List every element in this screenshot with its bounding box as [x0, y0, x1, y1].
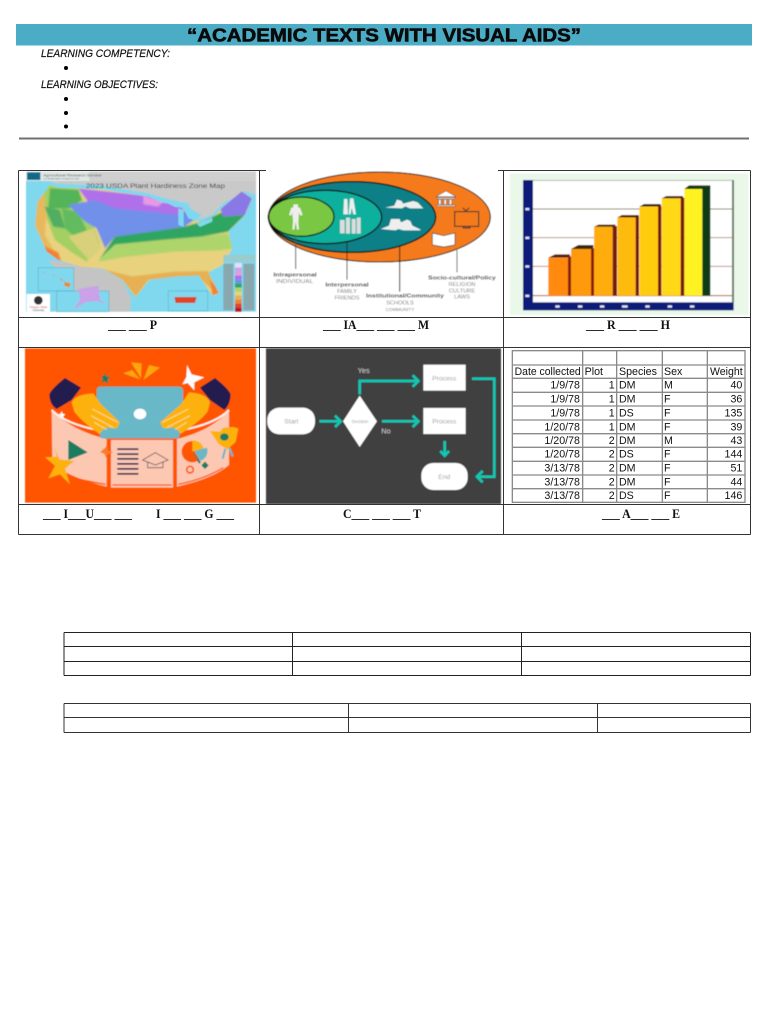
label: policy: LAWS: [454, 295, 470, 301]
icon: person: [289, 204, 303, 230]
community ellipse: [268, 182, 436, 252]
weight column: 44: [730, 476, 742, 488]
university logo: [27, 294, 50, 312]
plot column: 2: [609, 490, 615, 502]
node: process yes: Process: [432, 375, 457, 382]
answer: infographic word two: I ___ ___ G ___: [156, 506, 234, 521]
sex column: F: [664, 421, 671, 433]
left arm: [49, 378, 81, 409]
small orange star: [100, 445, 113, 458]
node: decision: [343, 396, 377, 447]
node: process yes: [423, 365, 466, 391]
plot column: [609, 380, 615, 502]
species column: DM: [619, 421, 636, 433]
small white star: [58, 411, 65, 419]
outer socio-cultural ellipse: [268, 172, 490, 262]
table header: Species: [619, 366, 657, 378]
species column: [619, 380, 636, 502]
species column: DM: [619, 380, 636, 392]
laptop logo: [134, 409, 146, 419]
axes: [523, 180, 734, 310]
image: flowchart: [266, 348, 501, 504]
date column: 1/9/78: [550, 380, 580, 392]
icon: government building: [436, 191, 456, 206]
weight column: 51: [730, 463, 742, 475]
answer: table: ___ A___ ___ E: [601, 506, 680, 521]
species column: DM: [619, 435, 636, 447]
label: interpersonal: Interpersonal: [325, 283, 369, 289]
label: community: [366, 294, 445, 312]
map title: 2023 USDA Plant Hardiness Zone Map: [86, 184, 226, 190]
table header: Sex: [664, 366, 683, 378]
laptop: [97, 387, 183, 438]
label: interpersonal: FRIENDS: [335, 296, 360, 302]
weight column: 39: [730, 421, 742, 433]
species column: DM: [619, 463, 636, 475]
icon: bird: [210, 427, 238, 459]
green star: [101, 372, 110, 384]
image: social ecological model: [267, 171, 498, 316]
plot column: 2: [609, 463, 615, 475]
map legend: [223, 255, 255, 312]
gridlines: [533, 209, 732, 296]
USDA header: U.S. DEPARTMENT OF AGRICULTURE: [43, 177, 80, 180]
icon: book: [432, 233, 455, 247]
label: intrapersonal: [273, 272, 317, 285]
node: process no: [423, 408, 466, 434]
table header: Plot: [585, 366, 603, 378]
node: decision: Decision: [352, 419, 369, 424]
sex column: F: [664, 463, 671, 475]
label: intrapersonal: Intrapersonal: [273, 272, 317, 278]
right hand: [160, 392, 210, 434]
weight column: 40: [730, 380, 742, 392]
date column: 1/9/78: [550, 407, 580, 419]
species column: DM: [619, 394, 636, 406]
node: start: Start: [284, 419, 299, 426]
white star: [182, 365, 204, 390]
weight column: 43: [730, 435, 742, 447]
date column: 1/20/78: [544, 421, 580, 433]
table grid: [512, 351, 745, 502]
plot column: 1: [609, 394, 615, 406]
answer: graph: ___ R ___ ___ H: [585, 317, 670, 332]
yes label: Yes: [358, 366, 370, 375]
node: end: [421, 463, 468, 490]
yellow star: [45, 447, 74, 484]
answer: map: ___ ___ P: [107, 317, 157, 332]
table header: Date collected: [515, 366, 581, 378]
species column: DS: [619, 407, 634, 419]
university logo: Oregon State: [29, 305, 48, 309]
title: “ACADEMIC TEXTS WITH VISUAL AIDS”: [187, 26, 581, 46]
icon: family: [340, 218, 361, 234]
label: policy: CULTURE: [449, 288, 475, 294]
interpersonal ellipse: [268, 190, 382, 244]
species column: DS: [619, 449, 634, 461]
date column: 1/9/78: [550, 394, 580, 406]
icon: diamond: [201, 462, 209, 469]
icon: friends: [343, 198, 356, 214]
plot column: 1: [609, 380, 615, 392]
sex column: F: [664, 490, 671, 502]
interpersonal connector: [345, 242, 348, 280]
label: community: SCHOOLS: [386, 300, 414, 306]
weight column: [725, 380, 742, 502]
Alaska inset: [57, 286, 109, 312]
bars: [548, 185, 710, 296]
Hawaii inset: [38, 268, 74, 291]
icon: television: [455, 208, 479, 228]
date column: 3/13/78: [544, 463, 580, 475]
weight column: 135: [725, 407, 742, 419]
plot column: 1: [609, 407, 615, 419]
date column: 3/13/78: [544, 476, 580, 488]
label: community: COMMUNITY: [386, 307, 414, 312]
plot column: 1: [609, 421, 615, 433]
plot column: 2: [609, 435, 615, 447]
arrows: [319, 375, 494, 482]
image: USDA plant hardiness zone map: [26, 172, 256, 312]
learning competency heading: LEARNING COMPETENCY:: [41, 48, 170, 60]
sex column: M: [664, 380, 673, 392]
table header: Weight: [710, 366, 743, 378]
right arm: [200, 378, 231, 410]
date column: 1/20/78: [544, 435, 580, 447]
policy connector: [455, 250, 458, 272]
icon: pie chart: [182, 440, 208, 464]
species column: DS: [619, 490, 634, 502]
plot column: 2: [609, 476, 615, 488]
USDA header: [26, 172, 102, 181]
sex column: F: [664, 394, 671, 406]
species column: DM: [619, 476, 636, 488]
answer: chart: C___ ___ ___ T: [343, 506, 421, 521]
sex column: F: [664, 407, 671, 419]
label: policy: RELIGION: [448, 282, 476, 288]
empty table one: [64, 632, 750, 676]
image: data table: [512, 351, 745, 502]
icon: gear: [187, 466, 193, 473]
date column: 1/20/78: [544, 449, 580, 461]
curved screen panels: [52, 410, 229, 488]
left hand finger lines: [91, 409, 118, 430]
great lakes: [162, 200, 212, 227]
answer: diagram: ___ IA___ ___ ___ M: [322, 317, 429, 332]
no label: No: [381, 426, 391, 435]
node: end: End: [438, 474, 451, 481]
node: process no: Process: [432, 419, 457, 426]
learning competency and objectives: [41, 48, 170, 128]
label: policy: Socio-cultural/Policy: [428, 275, 497, 281]
sex column: [664, 380, 673, 502]
date column: 3/13/78: [544, 490, 580, 502]
image: bar chart: [510, 173, 748, 315]
empty table two: [64, 704, 750, 732]
image: laptop illustration: [25, 348, 256, 503]
label: community: Institutional/Community: [366, 294, 445, 300]
sex column: F: [664, 449, 671, 461]
university logo: University: [32, 308, 45, 312]
objective bullets: [64, 97, 68, 128]
weight column: 144: [725, 449, 742, 461]
table header: [515, 366, 743, 378]
community connector: [398, 247, 401, 292]
learning objectives heading: LEARNING OBJECTIVES:: [41, 79, 158, 91]
icon: play triangle: [68, 440, 88, 460]
visual aids table: [18, 170, 750, 534]
label: interpersonal: [325, 283, 369, 302]
sex column: M: [664, 435, 673, 447]
icon: graduation cap: [143, 453, 168, 468]
answer: infographic word one: ___ I___U___ ___: [42, 506, 132, 521]
icon: community buildings: [381, 219, 421, 230]
label: intrapersonal: INDIVIDUAL: [276, 279, 313, 285]
individual ellipse: [269, 197, 334, 236]
icon: schools: [385, 200, 423, 208]
weight column: 146: [725, 490, 742, 502]
axis ticks: [525, 208, 694, 308]
Puerto Rico inset: [168, 291, 208, 311]
left hand: [72, 393, 120, 434]
individual connector: [294, 236, 297, 269]
label: interpersonal: FAMILY: [337, 289, 357, 295]
icon: text lines: [117, 448, 138, 475]
date column: [544, 380, 580, 502]
plot column: 2: [609, 449, 615, 461]
weight column: 36: [730, 394, 742, 406]
sex column: F: [664, 476, 671, 488]
table grid lines: [18, 170, 750, 534]
competency bullet: [64, 66, 68, 70]
title banner: [16, 24, 752, 46]
sparks: [123, 362, 160, 380]
USDA header: Agricultural Research Service: [43, 173, 102, 177]
right hand finger lines: [162, 409, 190, 430]
node: start: [267, 408, 315, 434]
label: policy: [428, 275, 497, 301]
